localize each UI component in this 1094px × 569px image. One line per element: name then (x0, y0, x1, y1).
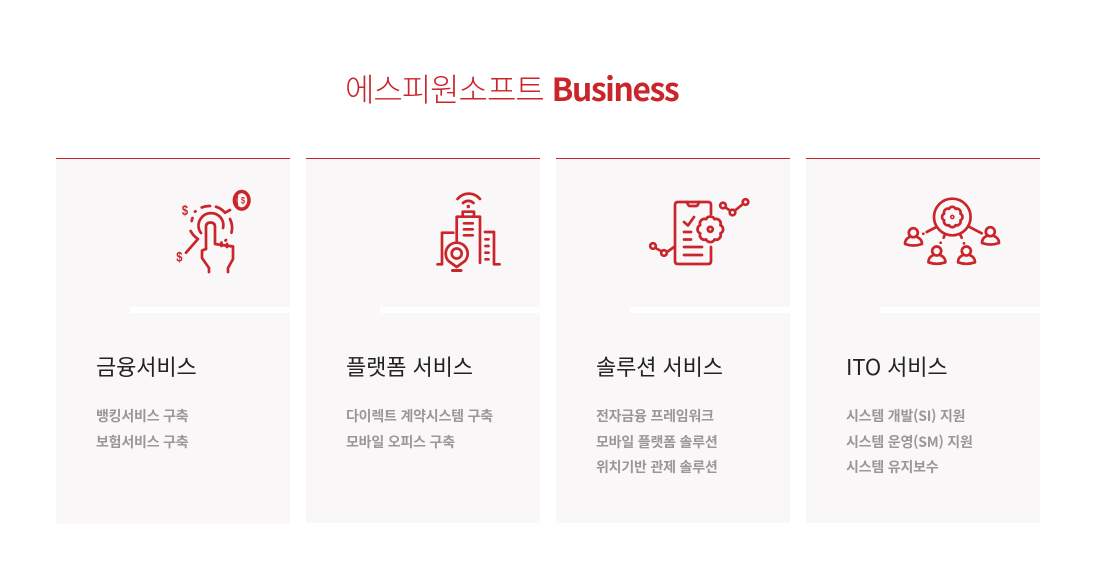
panel: 솔루션 서비스 (556, 158, 790, 523)
icon: finger touch with coins (176, 190, 251, 274)
icon: gear hub with people (904, 197, 1000, 266)
service list (846, 406, 973, 477)
service list (346, 406, 493, 452)
heading: 금융서비스 (96, 350, 197, 382)
title: 에스피원소프트 Business (345, 65, 678, 111)
heading: ITO 서비스 (846, 350, 948, 382)
heading: 솔루션 서비스 (596, 350, 723, 382)
service list: 뱅킹서비스 구축 (96, 406, 188, 426)
service list (96, 406, 188, 452)
service list: 시스템 유지보수 (846, 457, 938, 477)
notch: white bar (630, 307, 790, 313)
icon: building with wifi and pin (436, 192, 501, 272)
service list (596, 406, 718, 477)
service list: 모바일 오피스 구축 (346, 432, 455, 452)
panel: 금융서비스 (56, 158, 290, 524)
icon detail: dollar signs: $ (182, 203, 188, 218)
service list: 보험서비스 구축 (96, 432, 188, 452)
service list: 전자금융 프레임워크 (596, 406, 714, 426)
icon detail: dollar signs (176, 196, 245, 265)
notch: white bar (880, 307, 1040, 313)
service list: 시스템 운영(SM) 지원 (846, 432, 973, 452)
service list: 다이렉트 계약시스템 구축 (346, 406, 493, 426)
notch: white bar (130, 307, 290, 313)
icon: phone with gear and graph (648, 198, 750, 266)
service list: 위치기반 관제 솔루션 (596, 457, 718, 477)
panel: ITO 서비스 (806, 158, 1040, 523)
icon detail: dollar signs: $ (241, 196, 245, 206)
notch: white bar (380, 307, 540, 313)
service list: 시스템 개발(SI) 지원 (846, 406, 965, 426)
icon detail: dollar signs: $ (176, 249, 182, 265)
panel: 플랫폼 서비스 (306, 158, 540, 523)
service list: 모바일 플랫폼 솔루션 (596, 432, 718, 452)
heading: 플랫폼 서비스 (346, 350, 473, 382)
